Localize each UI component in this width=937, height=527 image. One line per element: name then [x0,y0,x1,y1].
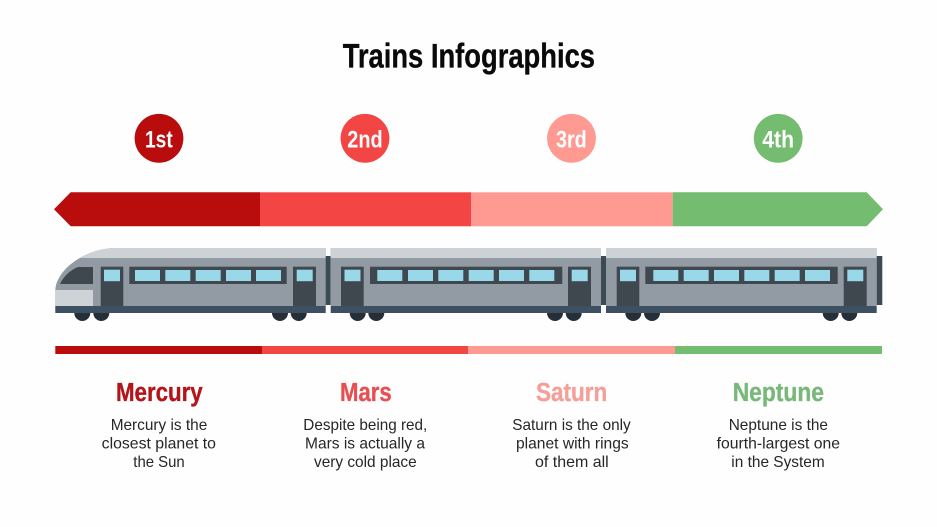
coupling 2 [601,256,606,305]
carriage 3 [606,248,877,321]
text: Mercury description: Mercury is the [111,417,207,434]
carriage 1: locomotive [50,248,330,321]
text: Mercury description: the Sun [133,454,185,471]
badge: 3rd [547,114,596,163]
text: Neptune description: fourth-largest one [717,436,840,452]
badge: 2nd [341,114,389,163]
text: Mercury description [102,417,216,471]
text: Neptune description: Neptune is the [729,417,828,434]
text: Saturn description: of them all [535,454,609,471]
text: Mars description: Despite being red, [303,417,427,434]
text: Mars description: Mars is actually a [305,436,425,452]
heading: Saturn: Saturn [536,379,607,407]
carriage 2 [331,248,601,321]
rear coupling [877,256,882,305]
text: Mars description: very cold place [314,454,417,471]
step badges [135,114,803,163]
text: Neptune description: in the System [731,454,825,471]
text: Neptune description [717,417,840,471]
badge: 1st [135,114,183,163]
badge: 4th: 4th [762,126,794,153]
heading: Neptune: Neptune [733,379,824,407]
column: Saturn [512,379,631,471]
badge: 3rd: 3rd [556,126,587,153]
text: Saturn description: planet with rings [516,436,629,452]
coupling 1 [326,256,331,305]
track bar [55,346,882,354]
double-headed arrow timeline [54,192,883,226]
text: Mars description [303,417,427,471]
title: Trains Infographics [343,37,595,75]
heading: Mercury: Mercury [116,379,203,407]
badge: 2nd: 2nd [347,126,383,153]
text: Saturn description [512,417,631,471]
text: Mercury description: closest planet to [102,436,216,452]
text: Saturn description: Saturn is the only [512,417,631,434]
column: Mars [303,379,427,471]
badge: 4th [754,114,803,163]
column: Mercury [102,379,216,471]
train [50,248,882,321]
heading: Mars: Mars [340,379,392,407]
column: Neptune [717,379,840,471]
badge: 1st: 1st [145,126,173,153]
